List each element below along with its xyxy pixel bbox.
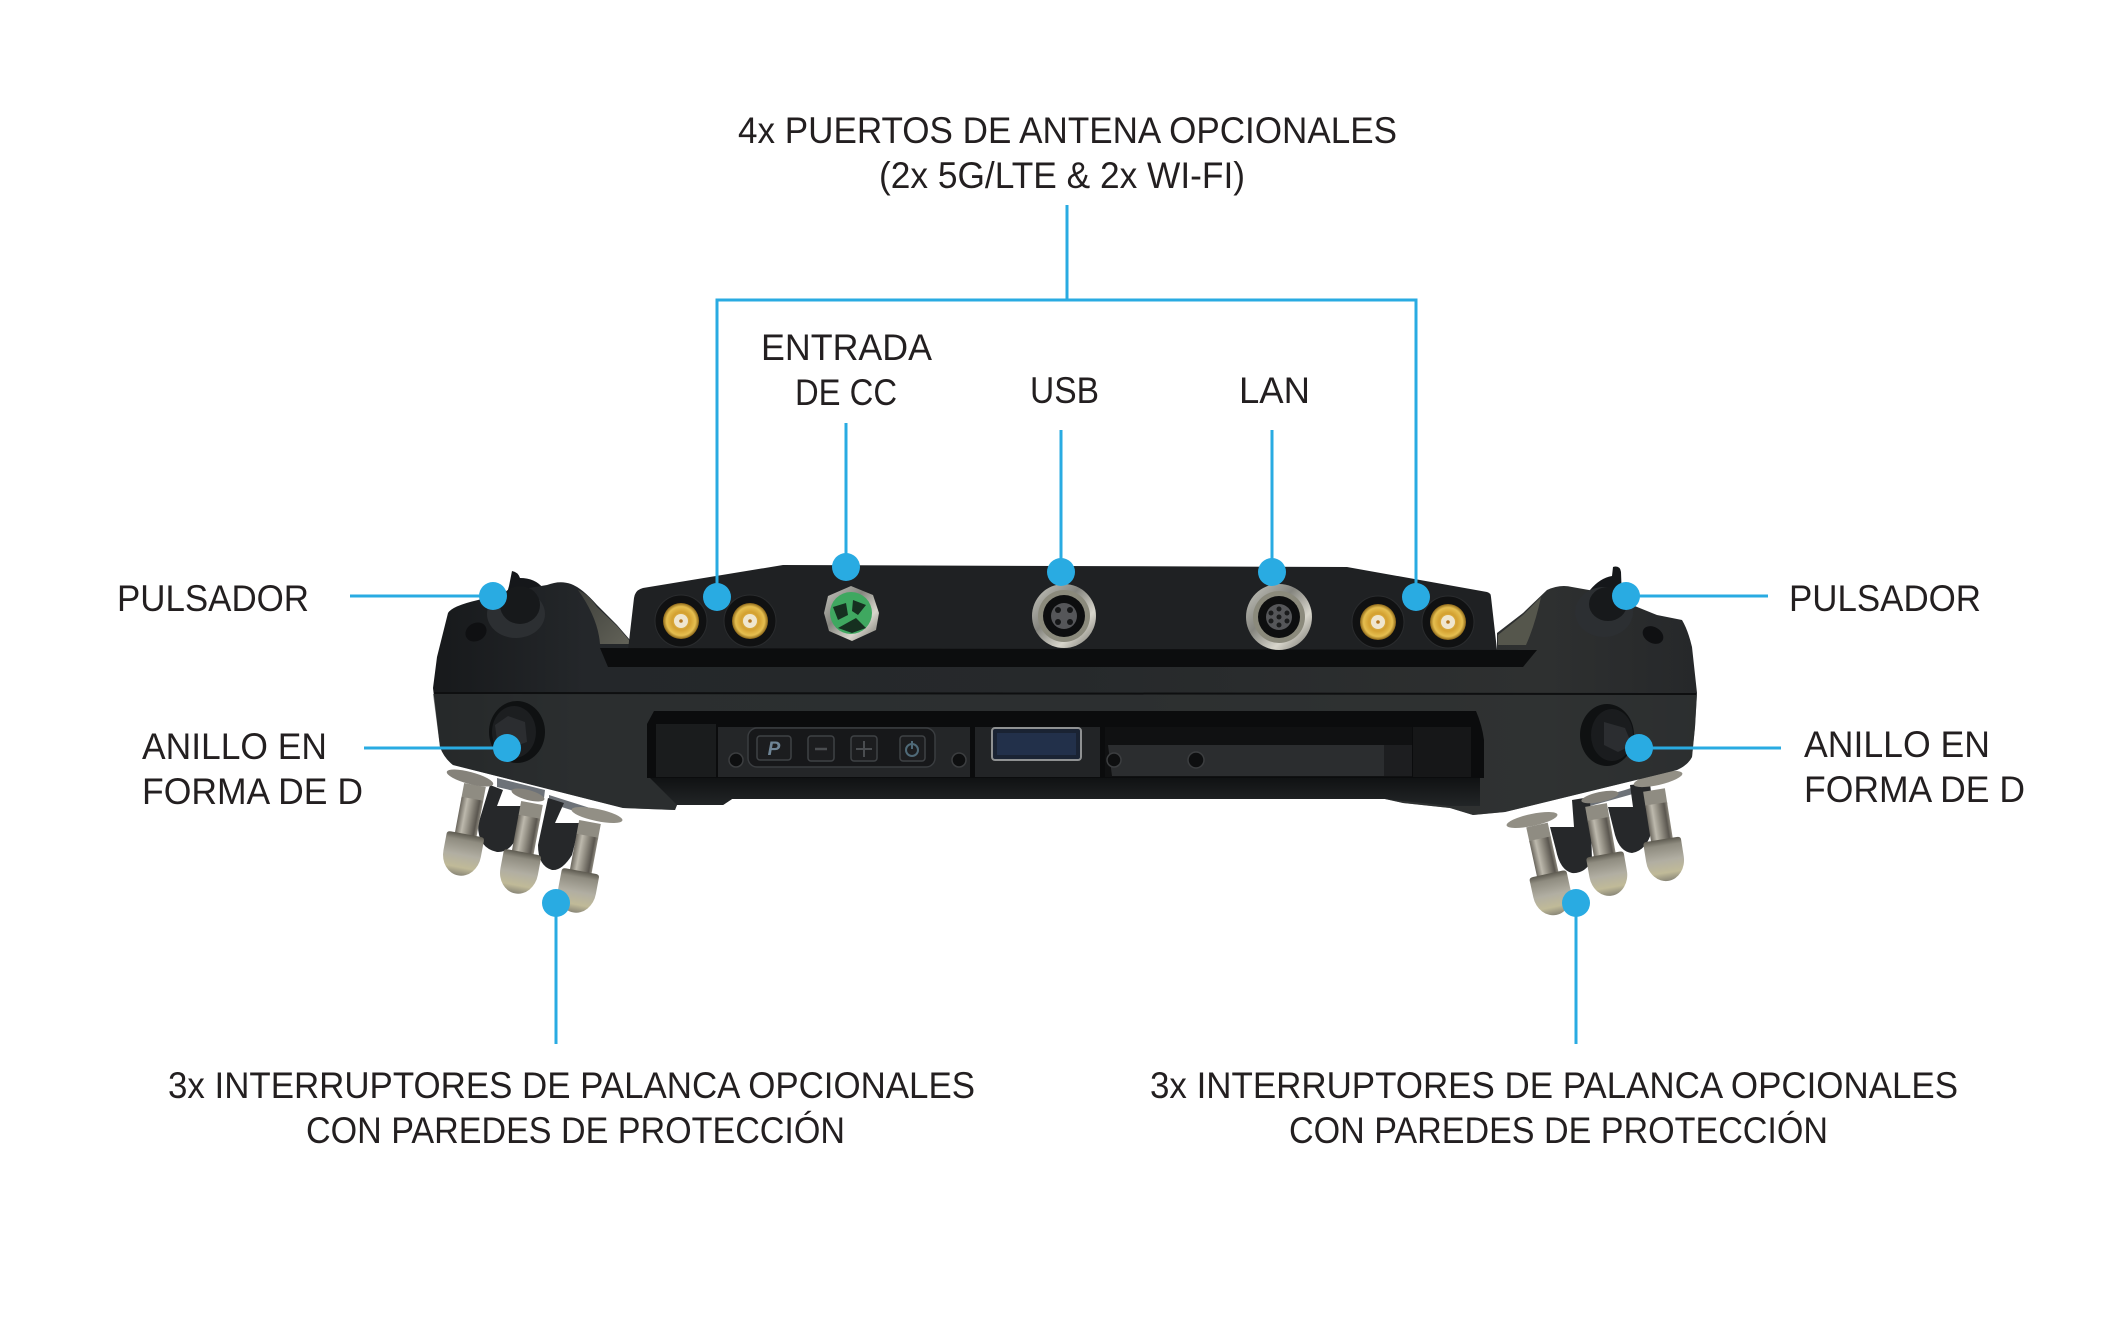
- label: right toggle switches: CON PAREDES DE PROTECCIÓN: [1289, 1110, 1828, 1151]
- button module: [718, 727, 970, 777]
- connector panel: [628, 565, 1497, 650]
- label: USB: USB: [1030, 370, 1099, 411]
- label: left push button: PULSADOR: [117, 578, 309, 619]
- icon: DC input connector: [824, 586, 879, 641]
- icon: right power button: [1575, 587, 1667, 647]
- right toggle switches with guards: [1505, 768, 1687, 919]
- seam line: [434, 693, 1696, 694]
- display module: [975, 727, 1100, 777]
- icon: SMA antenna port 3: [1352, 596, 1404, 648]
- label: left toggle switches: 3x INTERRUPTORES DE PALANCA OPCIONALES: [168, 1065, 975, 1106]
- icon: right push button cap: [1590, 567, 1622, 604]
- main body shell: [433, 582, 1697, 815]
- icon: LAN connector: [1246, 584, 1312, 650]
- icon: right D-ring mount: [1580, 704, 1634, 766]
- button P: P: [768, 739, 781, 760]
- left reflection on shoulder: [578, 590, 629, 644]
- right inner block: [1413, 727, 1471, 777]
- lower lip: [650, 778, 1480, 806]
- lower shell lighter half: [433, 694, 1697, 815]
- label: left toggle switches: [168, 1065, 975, 1151]
- leader: left D-ring: [364, 734, 521, 762]
- recess with bay modules: [647, 711, 1484, 778]
- label: antenna ports: (2x 5G/LTE & 2x WI-FI): [879, 155, 1245, 196]
- leader: DC input: [832, 423, 860, 581]
- left inner block: [656, 724, 716, 777]
- leader: LAN: [1258, 430, 1286, 586]
- icon: left power button: [462, 586, 545, 645]
- label: antenna ports: [738, 110, 1397, 196]
- leader: left push button: [350, 582, 507, 610]
- icon: left D-ring mount: [489, 701, 545, 763]
- leader: right toggles: [1562, 889, 1590, 1044]
- icon: left push button cap: [505, 571, 543, 600]
- label: right D-ring: [1804, 724, 2025, 810]
- icon: SMA antenna port 2: [724, 595, 776, 647]
- leader: right D-ring: [1625, 734, 1781, 762]
- label: right D-ring: FORMA DE D: [1804, 769, 2025, 810]
- button minus: [808, 736, 834, 761]
- label: DC input: [761, 327, 932, 413]
- label: left toggle switches: CON PAREDES DE PROTECCIÓN: [306, 1110, 845, 1151]
- device photo: rugged tablet bottom edge: [433, 565, 1697, 919]
- icon: SMA antenna port 4: [1422, 596, 1474, 648]
- button power: [900, 736, 925, 761]
- label: right push button: PULSADOR: [1789, 578, 1981, 619]
- label: left D-ring: FORMA DE D: [142, 771, 363, 812]
- right reflection on shoulder: [1498, 597, 1541, 645]
- right bay lit plate: [1108, 745, 1384, 776]
- leader: USB: [1047, 430, 1075, 586]
- leader: right push button: [1612, 582, 1768, 610]
- display window: [992, 728, 1081, 760]
- leader: left toggles: [542, 889, 570, 1044]
- button plus: [851, 736, 877, 761]
- label: left D-ring: ANILLO EN: [142, 726, 327, 767]
- right bay dark: [1105, 727, 1412, 777]
- button membrane panel: [748, 728, 935, 767]
- label: right D-ring: ANILLO EN: [1804, 724, 1990, 765]
- screws: [729, 752, 1204, 768]
- label: right toggle switches: [1150, 1065, 1958, 1151]
- label: left D-ring: [142, 726, 363, 812]
- label: DC input: DE CC: [795, 372, 897, 413]
- icon: SMA antenna port 1: [655, 595, 707, 647]
- right bay end: [1384, 745, 1412, 776]
- label: LAN: LAN: [1239, 370, 1310, 411]
- button P: [757, 736, 791, 760]
- icon: USB connector: [1032, 584, 1096, 648]
- left toggle switches with guards: [439, 766, 624, 916]
- leader: antenna bracket: [703, 205, 1430, 611]
- callout leader lines and dots: [350, 205, 1781, 1044]
- label: antenna ports: 4x PUERTOS DE ANTENA OPCIONALES: [738, 110, 1397, 151]
- dark shelf below panel: [600, 648, 1537, 667]
- label: DC input: ENTRADA: [761, 327, 932, 368]
- label: right toggle switches: 3x INTERRUPTORES DE PALANCA OPCIONALES: [1150, 1065, 1958, 1106]
